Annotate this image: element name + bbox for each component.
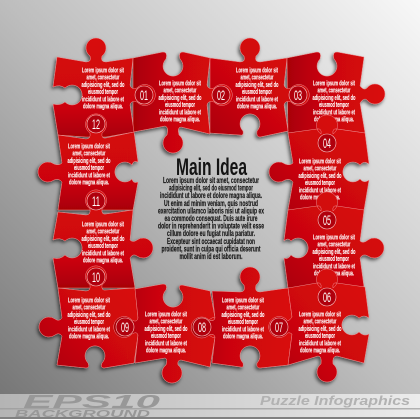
text: amet, consectetur <box>86 227 120 236</box>
badge 03: 03 <box>294 87 302 103</box>
text: Lorem ipsum dolor sit <box>159 78 201 88</box>
text: adipisicing elit, sed do <box>298 324 342 333</box>
main text block: mollit anim id est laborum. <box>180 251 242 261</box>
text: Lorem ipsum dolor sit <box>82 220 124 228</box>
text: eiusmod tempor <box>319 254 349 263</box>
text: amet, consectetur <box>240 73 274 82</box>
text: eiusmod tempor <box>242 87 272 96</box>
text: adipisicing elit, sed do <box>68 310 111 319</box>
text: amet, consectetur <box>304 317 337 326</box>
text: dolore magna aliqua. <box>314 269 354 278</box>
text <box>236 66 279 111</box>
main text block <box>158 175 264 261</box>
text: Lorem ipsum dolor sit <box>222 296 264 304</box>
text: adipisicing elit, sed do <box>158 93 202 102</box>
text: dolore magna aliqua. <box>300 193 340 202</box>
text: Lorem ipsum dolor sit <box>299 310 341 318</box>
text: eiusmod tempor <box>228 317 258 326</box>
text: adipisicing elit, sed do <box>82 80 125 89</box>
text: dolore magna aliqua. <box>314 115 354 124</box>
text: incididunt ut labore et <box>145 338 187 347</box>
text: dolore magna aliqua. <box>160 115 200 124</box>
text: incididunt ut labore et <box>82 248 124 257</box>
badge 10: 10 <box>92 269 100 285</box>
piece 11 <box>38 114 138 210</box>
text: dolore magna aliqua. <box>223 332 263 341</box>
text: eiusmod tempor <box>319 100 349 109</box>
text: eiusmod tempor <box>74 163 104 172</box>
text: incididunt ut labore et <box>222 324 264 333</box>
text <box>144 310 188 355</box>
text <box>298 310 342 355</box>
piece 06 <box>269 269 369 382</box>
main text block: Ut enim ad minim veniam, quis nostrud <box>164 198 258 208</box>
badge 02: 02 <box>217 87 225 103</box>
text: adipisicing elit, sed do <box>82 234 125 243</box>
main text block: Excepteur sint occaecat cupidatat non <box>167 236 255 246</box>
text: incididunt ut labore et <box>82 94 124 103</box>
piece 04 <box>269 115 369 210</box>
text: dolore magna aliqua. <box>69 332 109 341</box>
text: adipisicing elit, sed do <box>222 310 265 319</box>
text: dolore magna aliqua. <box>237 102 277 111</box>
text: eiusmod tempor <box>88 241 118 250</box>
badge 12: 12 <box>92 116 100 132</box>
text: dolore magna aliqua. <box>300 346 340 355</box>
piece 09 <box>39 266 138 368</box>
watermark: EPS10: EPS10 <box>23 392 160 412</box>
text: amet, consectetur <box>150 317 183 326</box>
main text block: incididunt ut labore et dolore magna aliqua. <box>160 190 262 200</box>
text <box>312 78 356 124</box>
text: dolore magna aliqua. <box>146 346 186 355</box>
text: amet, consectetur <box>318 86 351 95</box>
text: Lorem ipsum dolor sit <box>82 66 124 74</box>
text: amet, consectetur <box>226 303 260 312</box>
badge 05: 05 <box>323 212 331 228</box>
piece 12 <box>53 38 155 137</box>
text <box>222 296 265 341</box>
text: adipisicing elit, sed do <box>312 93 356 102</box>
text <box>82 220 125 265</box>
text: adipisicing elit, sed do <box>68 156 111 165</box>
text: incididunt ut labore et <box>159 107 201 116</box>
watermark: Puzzle Infographics: Puzzle Infographics <box>260 393 410 408</box>
badge 08: 08 <box>198 319 206 335</box>
text: Lorem ipsum dolor sit <box>236 66 278 74</box>
piece 05 <box>284 192 384 288</box>
text: amet, consectetur <box>304 164 337 173</box>
text: eiusmod tempor <box>88 87 118 96</box>
badge 09: 09 <box>121 319 129 335</box>
text: incididunt ut labore et <box>299 185 341 194</box>
text: dolore magna aliqua. <box>83 256 123 265</box>
text: incididunt ut labore et <box>299 338 341 347</box>
text: incididunt ut labore et <box>68 170 110 179</box>
main text block: cillum dolore eu fugiat nulla pariatur. <box>167 228 255 238</box>
piece 07 <box>191 267 292 368</box>
text: eiusmod tempor <box>151 331 181 340</box>
main text block: adipisicing elit, sed do eiusmod tempor <box>169 183 253 193</box>
puzzle frame <box>38 38 385 383</box>
text: amet, consectetur <box>164 86 197 95</box>
text: adipisicing elit, sed do <box>236 80 279 89</box>
badge 01: 01 <box>140 87 148 103</box>
text: Lorem ipsum dolor sit <box>68 142 110 150</box>
text: eiusmod tempor <box>305 178 335 187</box>
text: Lorem ipsum dolor sit <box>68 296 110 304</box>
text: amet, consectetur <box>72 303 106 312</box>
title: Main Idea <box>176 154 247 181</box>
text: incididunt ut labore et <box>236 94 278 103</box>
badge 04: 04 <box>323 135 331 151</box>
text: incididunt ut labore et <box>313 261 355 270</box>
text: Lorem ipsum dolor sit <box>313 232 355 242</box>
main text block: Lorem ipsum dolor sit amet, consectetur <box>163 175 259 185</box>
text: incididunt ut labore et <box>313 107 355 116</box>
text: eiusmod tempor <box>165 100 195 109</box>
text <box>68 142 111 187</box>
bottom band <box>0 392 420 419</box>
main text block: exercitation ullamco laboris nisi ut aliquip ex <box>158 205 264 215</box>
piece 03 <box>287 52 385 133</box>
text: dolore magna aliqua. <box>83 102 123 111</box>
text: eiusmod tempor <box>305 331 335 340</box>
text <box>312 232 356 278</box>
text: dolore magna aliqua. <box>69 178 109 187</box>
text <box>298 156 342 202</box>
text: amet, consectetur <box>72 149 106 158</box>
text: eiusmod tempor <box>74 317 104 326</box>
text <box>82 66 125 111</box>
text: incididunt ut labore et <box>68 324 110 333</box>
text <box>68 296 111 341</box>
text: Lorem ipsum dolor sit <box>145 310 187 318</box>
piece 02 <box>210 38 309 137</box>
text: amet, consectetur <box>86 73 120 82</box>
text: Lorem ipsum dolor sit <box>299 156 341 166</box>
text: adipisicing elit, sed do <box>144 324 188 333</box>
piece 01 <box>133 52 232 153</box>
text: adipisicing elit, sed do <box>298 171 342 180</box>
main text block: proident, sunt in culpa qui officia deserunt <box>162 243 261 253</box>
text: adipisicing elit, sed do <box>312 247 356 256</box>
piece 10 <box>53 190 153 288</box>
text: amet, consectetur <box>318 240 351 249</box>
piece 08 <box>114 284 227 383</box>
main text block: ea commodo consequat. Duis aute irure <box>164 213 258 223</box>
main text block: dolor in reprehenderit in voluptate velit esse <box>158 221 264 231</box>
badge 11: 11 <box>92 193 100 209</box>
text: Lorem ipsum dolor sit <box>313 78 355 88</box>
badge 07: 07 <box>275 319 283 335</box>
badge 06: 06 <box>323 289 331 305</box>
text <box>158 78 202 124</box>
